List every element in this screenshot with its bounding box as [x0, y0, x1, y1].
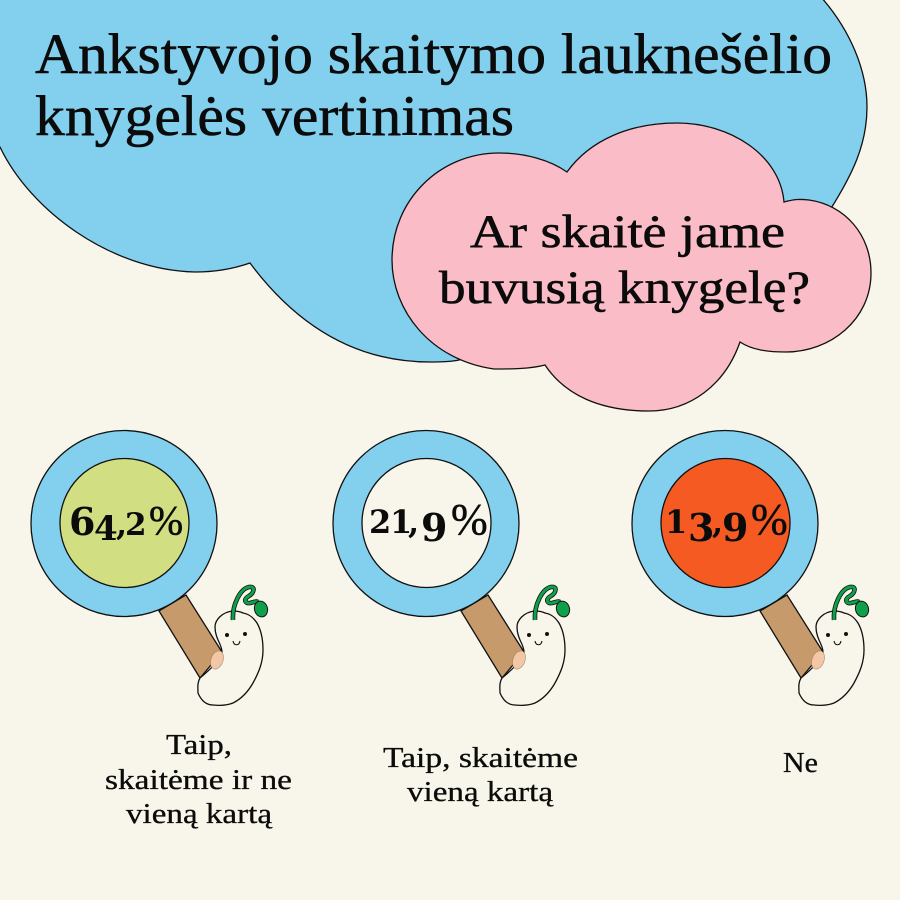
value: 9 [722, 505, 748, 550]
handle [461, 595, 524, 678]
value: 3 [688, 505, 714, 550]
lens ring [333, 430, 519, 616]
label 2: vieną kartą [407, 777, 554, 808]
value: % [149, 497, 183, 543]
title: knygelės vertinimas [35, 85, 514, 148]
value: 4 [94, 509, 118, 549]
magnifier 3: 13,9% [632, 430, 870, 705]
handle [159, 595, 222, 678]
value: 6 [69, 499, 95, 544]
lens centre [362, 458, 491, 588]
title: Ankstyvojo skaitymo lauknešėlio [35, 23, 832, 86]
lens ring [632, 430, 818, 616]
value: % [751, 495, 788, 544]
pink cloud [392, 123, 871, 411]
lens centre [60, 458, 189, 588]
value: 9 [421, 505, 447, 550]
label 1: vieną kartą [126, 799, 273, 830]
handle [760, 595, 823, 678]
label 1: Taip, [166, 730, 232, 761]
bean character [799, 587, 870, 705]
label 1 [105, 730, 292, 830]
label 1: skaitėme ir ne [105, 765, 292, 796]
value: , [712, 503, 723, 541]
label 2: Taip, skaitėme [383, 743, 578, 774]
label 2 [383, 743, 578, 808]
value: 1 [665, 503, 687, 541]
value: 2 [369, 503, 391, 541]
question: Ar skaitė jame [470, 206, 785, 258]
value: , [116, 505, 127, 543]
question: buvusią knygelę? [439, 262, 810, 314]
value: % [451, 495, 488, 544]
magnifier 1: 64,2% [31, 430, 269, 705]
title [35, 23, 832, 148]
blue cloud header [0, 0, 867, 362]
label 3: Ne [783, 748, 818, 779]
value: , [408, 503, 419, 541]
magnifier 2: 21,9% [333, 430, 571, 705]
bean character [198, 587, 269, 705]
value: 2 [125, 507, 147, 543]
value: 1 [390, 503, 412, 541]
lens ring [31, 430, 217, 616]
lens centre [661, 458, 790, 588]
bean character [500, 587, 571, 705]
question [439, 206, 810, 314]
